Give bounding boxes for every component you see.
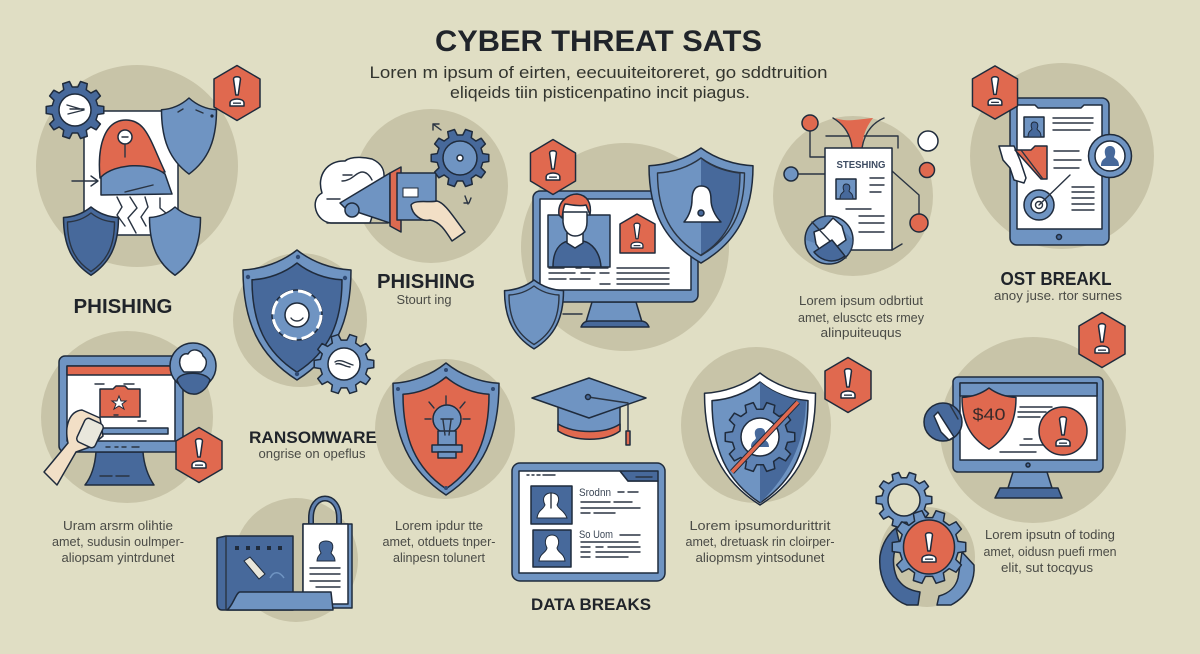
label: phishing: PHISHING	[74, 295, 172, 318]
panel: monitor with person	[504, 140, 753, 351]
shield	[704, 373, 816, 505]
cloud badge	[170, 343, 216, 394]
name 1: Srodnn	[579, 487, 611, 499]
red alert circle	[1039, 407, 1087, 455]
price shield	[962, 388, 1016, 449]
panel: tablet	[970, 63, 1154, 249]
text block	[52, 519, 184, 565]
gear	[431, 130, 489, 186]
slash fill	[732, 402, 798, 472]
text block: amet, elusctc ets rmey	[798, 311, 925, 325]
monitor stand	[85, 452, 154, 485]
alert hexagon	[972, 66, 1018, 119]
label: ost breakl: OST BREAKL	[1000, 269, 1112, 289]
red dome	[99, 120, 165, 178]
face gear	[272, 290, 322, 340]
text block: Lorem ipsutn of toding	[985, 528, 1115, 542]
label: ransomware: RANSOMWARE	[249, 428, 377, 447]
label: phishing 2: PHISHING	[377, 271, 475, 293]
text block: alinpuiteuqus	[820, 326, 902, 340]
text block: amet, oidusn puefi rmen	[984, 545, 1117, 559]
panel: gear shield	[681, 347, 871, 505]
panel: lock and badge	[217, 498, 358, 622]
profile photo 2	[533, 530, 571, 567]
text block: Uram arsrm olihtie	[63, 519, 173, 533]
arrow	[72, 176, 98, 186]
screen	[67, 366, 175, 441]
panel: phishing helmet	[36, 65, 260, 275]
light shield	[150, 207, 200, 275]
text block	[382, 519, 496, 565]
text block: Lorem ipsumordurittrit	[690, 519, 831, 533]
alert hexagon	[530, 140, 576, 194]
main gear	[892, 511, 966, 583]
text block: aliopsam yintrdunet	[62, 551, 175, 565]
gear	[725, 403, 795, 471]
red folder	[100, 386, 140, 417]
intro text: Loren m ipsum of eirten, eecuuiteitoreret, go sddtruition	[370, 63, 828, 82]
intro text	[370, 63, 828, 102]
alert hexagon	[176, 428, 222, 482]
label: data breaks: DATA BREAKS	[531, 595, 651, 614]
icon: graduation cap	[532, 378, 646, 445]
big shield	[649, 148, 753, 263]
panel: document network	[773, 115, 938, 276]
profile photo 1	[531, 486, 572, 524]
sub label: anoy juse. rtor surnes	[994, 289, 1122, 303]
torn file	[999, 146, 1047, 183]
sub label: Stourt ing	[396, 293, 452, 307]
panel: gears	[876, 473, 975, 607]
photo	[836, 179, 856, 199]
panel: monitor with hand	[41, 331, 222, 503]
megaphone	[340, 173, 390, 223]
padlock shackle	[311, 498, 339, 530]
text block	[686, 519, 834, 565]
red slash	[732, 402, 798, 472]
monitor	[533, 191, 698, 302]
photo	[1024, 117, 1044, 137]
lower gear arc	[880, 528, 920, 605]
intro text: eliqeids tiin pisticenpatino incit piagus.	[450, 83, 750, 102]
funnel	[835, 118, 873, 148]
dark shield	[64, 207, 118, 275]
hand and mouse	[44, 410, 105, 485]
alert hexagon	[825, 358, 871, 412]
small arrows	[433, 124, 471, 204]
blocked icon	[805, 216, 853, 264]
folder	[217, 536, 293, 610]
profile photo	[548, 194, 610, 267]
text lines	[549, 268, 669, 284]
paper	[825, 148, 892, 250]
monitor	[59, 356, 183, 452]
card	[397, 173, 436, 220]
paper sheet	[84, 111, 178, 235]
rivets	[246, 255, 347, 376]
screen	[960, 383, 1097, 460]
blocked icon	[924, 403, 962, 441]
small shield	[504, 280, 582, 349]
panel: bulb shield	[375, 359, 515, 499]
card screen	[519, 471, 658, 573]
gear	[314, 335, 374, 393]
text block	[798, 294, 925, 340]
large shield	[243, 250, 351, 380]
rivets	[396, 368, 495, 490]
tablet	[1010, 98, 1109, 245]
screen	[540, 199, 691, 290]
hand	[411, 201, 465, 241]
text block: amet, dretuask rin cloirper-	[686, 535, 834, 549]
price shield: $40	[972, 405, 1006, 424]
target	[1024, 175, 1070, 220]
text block: alinpesn tolunert	[393, 551, 486, 565]
alert hexagon	[1079, 312, 1125, 368]
text block: aliopmsm yintsodunet	[696, 551, 825, 565]
panel: browser card	[512, 463, 665, 581]
panel: monitor with price	[924, 312, 1126, 523]
monitor stand	[1008, 472, 1052, 488]
sub label: ongrise on opeflus	[258, 447, 366, 461]
network nodes	[784, 115, 938, 232]
red notice	[620, 214, 655, 253]
heading on paper: STESHING	[836, 159, 886, 171]
gear icon	[46, 82, 104, 138]
panel: smile shield	[233, 250, 374, 393]
cloud	[315, 157, 384, 223]
text block: amet, sudusin oulmper-	[52, 535, 184, 549]
text block: amet, otduets tnper-	[382, 535, 496, 549]
dome pin	[118, 130, 132, 157]
text block: elit, sut tocqyus	[1001, 561, 1093, 575]
wavy lines	[117, 197, 167, 233]
top gear	[876, 473, 932, 527]
blue shield	[162, 98, 216, 174]
text block: Lorem ipdur tte	[395, 519, 483, 533]
name 2: So Uom	[579, 529, 613, 541]
monitor stand	[586, 302, 642, 322]
title: CYBER THREAT SATS	[435, 25, 762, 58]
bulb	[425, 396, 470, 458]
alert hexagon	[214, 66, 260, 120]
avatar badge	[1088, 134, 1132, 178]
tablet screen	[1017, 105, 1102, 229]
id badge	[303, 524, 352, 608]
flap	[227, 592, 333, 610]
text block: Lorem ipsum odbrtiut	[799, 294, 924, 308]
shield	[393, 363, 499, 495]
panel: megaphone	[315, 109, 508, 263]
monitor	[953, 377, 1103, 472]
wires	[798, 131, 919, 250]
blue helmet base	[101, 166, 172, 195]
text block	[984, 528, 1117, 575]
